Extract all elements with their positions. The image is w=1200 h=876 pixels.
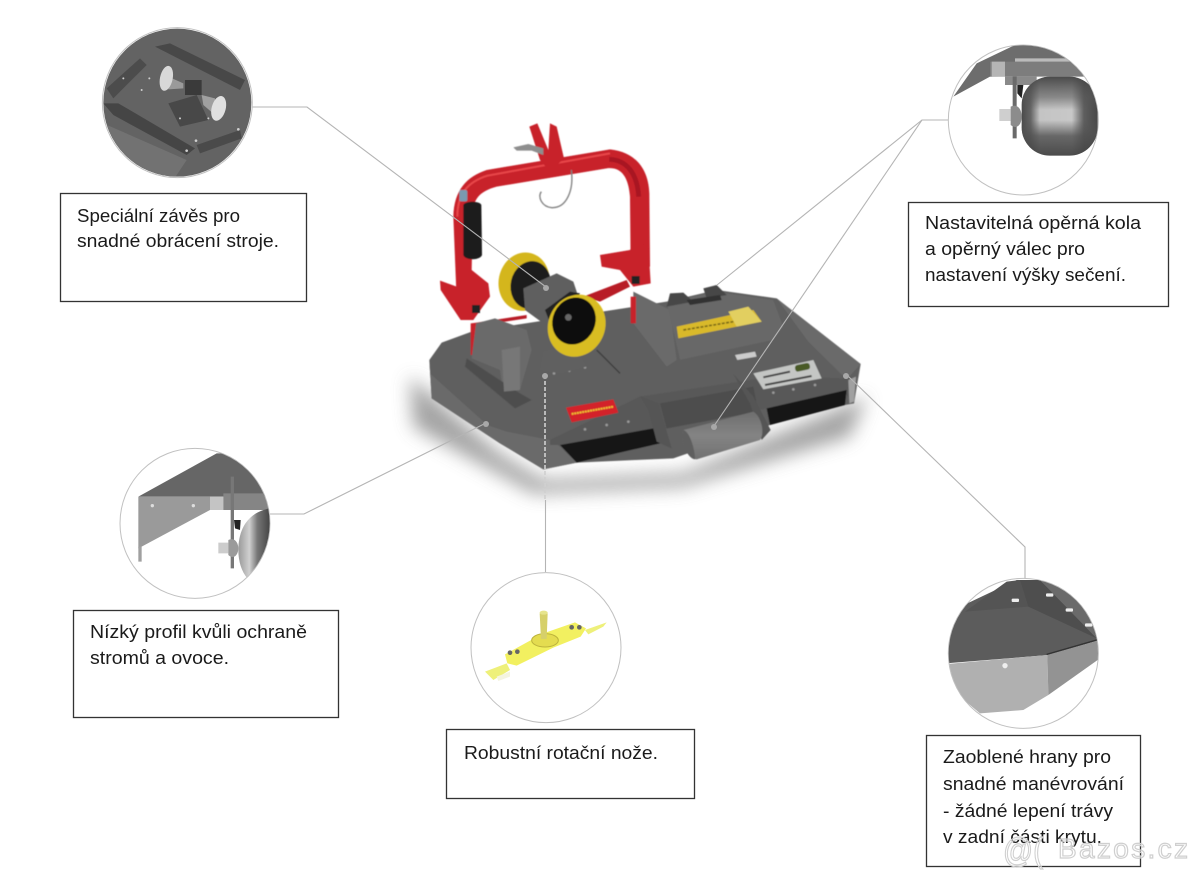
left support post <box>472 318 532 393</box>
leader line: blades lower <box>544 500 546 572</box>
text box: hitch: Speciální závěs pro <box>77 206 240 226</box>
gearbox housing on the right <box>633 285 783 367</box>
text box: hitch <box>60 194 306 302</box>
front roller assembly <box>640 374 771 459</box>
red frame <box>440 123 651 355</box>
right post bolts <box>632 276 640 284</box>
detail circle: hitch from below <box>100 27 253 180</box>
text box: support wheels: a opěrný válec pro <box>925 239 1085 259</box>
leader line: hitch <box>250 107 546 287</box>
leader line: support wheels <box>717 120 948 285</box>
text box: low profile: stromů a ovoce. <box>90 648 229 668</box>
leader line: blades <box>544 375 546 500</box>
text box: low profile <box>74 610 338 718</box>
text box: blades: Robustní rotační nože. <box>464 743 658 763</box>
mower deck <box>429 290 861 469</box>
pto shaft and yellow guards <box>493 248 616 373</box>
detail circle: support wheel <box>948 45 1100 195</box>
watermark: Bazos.cz <box>1058 833 1188 864</box>
hanging hook <box>540 170 572 208</box>
text box: rounded edges: v zadní části krytu. <box>943 827 1102 847</box>
ground shadow <box>410 377 867 493</box>
text box: rounded edges: snadné manévrování <box>943 774 1124 794</box>
leader dots <box>483 285 849 430</box>
detail circle: rounded edge <box>947 578 1100 728</box>
leader line: low profile <box>270 423 486 514</box>
apple label <box>753 360 822 389</box>
watermark: @( <box>1003 832 1044 870</box>
text box: rounded edges: Zaoblené hrany pro <box>943 747 1111 767</box>
text box: hitch: snadné obrácení stroje. <box>77 231 279 251</box>
photo: rotary mower <box>410 123 867 493</box>
text box: rounded edges <box>926 736 1140 866</box>
detail circle: rotary blade <box>471 573 621 723</box>
leader line: roller <box>714 120 922 426</box>
black shock absorber <box>463 202 482 259</box>
watermark <box>1003 832 1188 870</box>
text box: support wheels: Nastavitelná opěrná kola <box>925 213 1142 233</box>
leader line: rounded edges <box>848 376 1025 580</box>
text box: support wheels: nastavení výšky sečení. <box>925 265 1126 285</box>
text box: support wheels <box>908 202 1168 306</box>
text box: low profile: Nízký profil kvůli ochraně <box>90 622 307 642</box>
text box: blades <box>446 730 694 798</box>
text box: rounded edges: - žádné lepení trávy <box>943 801 1113 821</box>
red decal <box>566 399 618 422</box>
detail circle: low profile <box>120 448 270 598</box>
small label <box>735 352 757 360</box>
